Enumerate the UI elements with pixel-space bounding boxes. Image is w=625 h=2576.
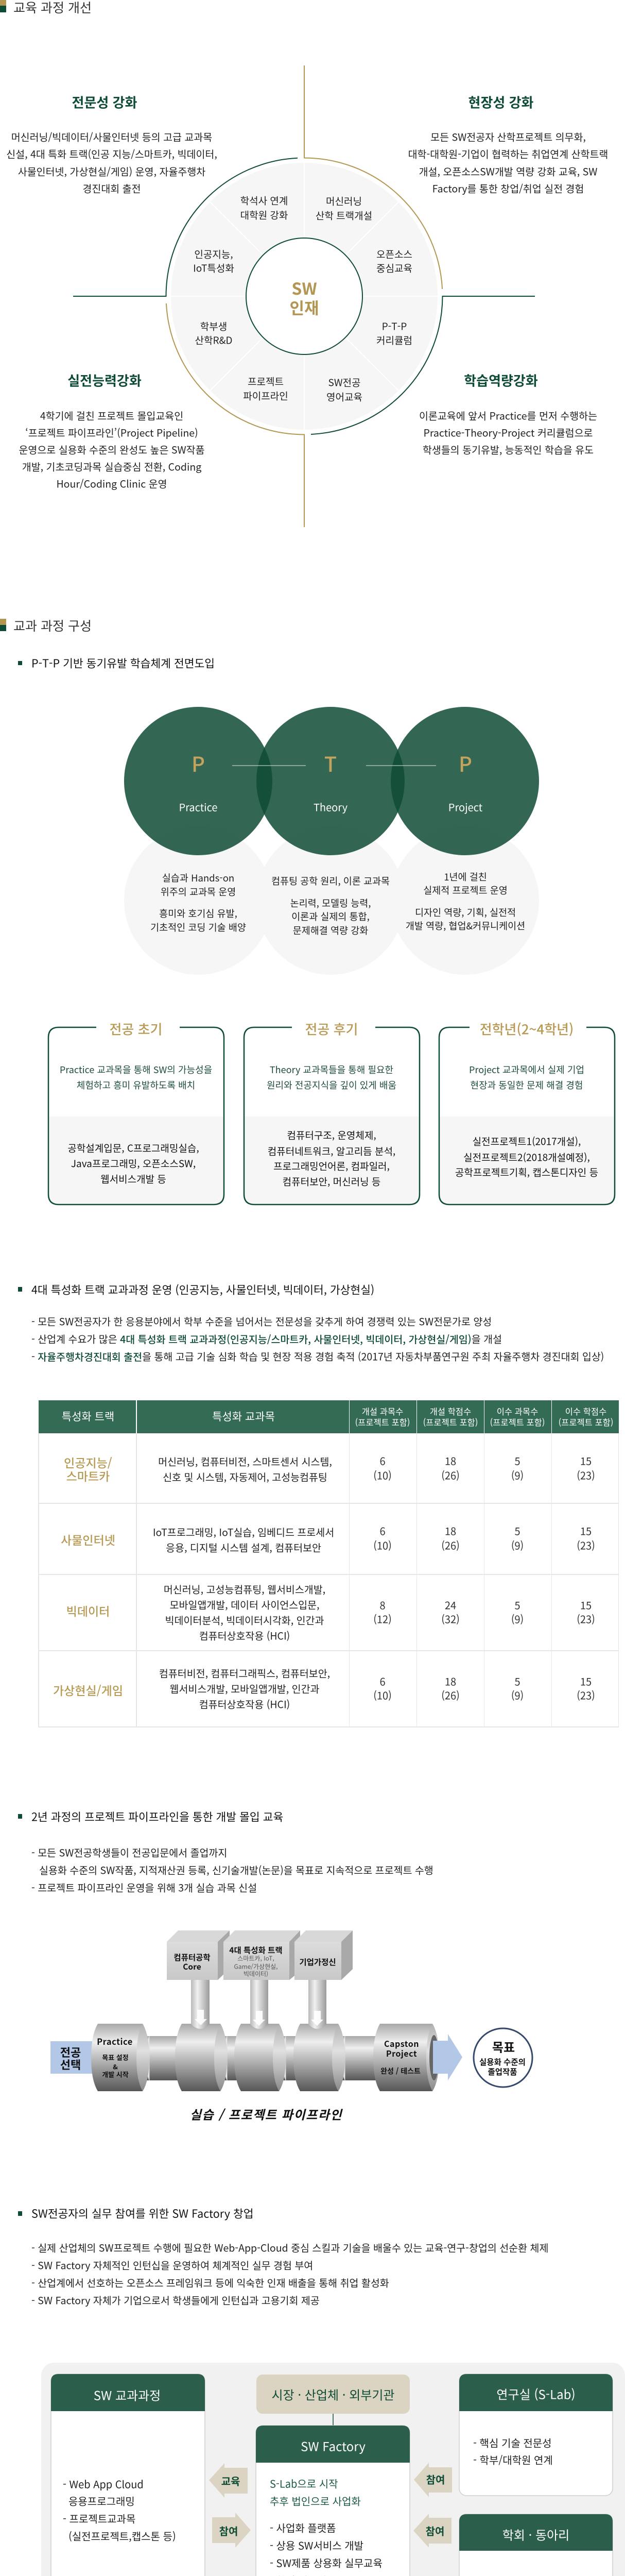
text block: learning ability: 학습역량강화 <box>464 371 538 389</box>
centre circle: SW talent: SW <box>291 276 317 300</box>
card: all years: 현장과 동일한 문제 해결 경험 <box>471 1078 583 1092</box>
theory detail text: 논리력, 모델링 능력, <box>290 896 371 910</box>
row: IoT <box>61 1523 595 1555</box>
sector labels: 대학원 강화 <box>240 208 288 222</box>
arrow: participation from S-Lab: 참여 <box>426 2472 445 2486</box>
label: capstone <box>380 2037 421 2076</box>
panel: SW factory ecosystem <box>41 2363 625 2576</box>
wheel disc with sectors <box>171 163 438 430</box>
card: S-Lab: 연구실 (S-Lab) <box>496 2384 576 2403</box>
arrow: participation from clubs <box>413 2514 452 2548</box>
card: SW factory: 추후 법인으로 사업화 <box>270 2494 361 2508</box>
card: late major: 프로그래밍언어론, 컴파일러, <box>273 1159 390 1173</box>
card: all years <box>439 1019 615 1205</box>
card: all years: 실전프로젝트2(2018개설예정), <box>463 1150 590 1164</box>
heading: curriculum composition: 교과 과정 구성 <box>13 616 92 635</box>
row: big data: 8 <box>379 1597 386 1613</box>
text block: learning ability: 이론교육에 앞서 Practice를 먼저 수행하는 <box>419 408 597 422</box>
card: SW curriculum: (실전프로젝트,캡스톤 등) <box>68 2529 176 2543</box>
row: big data: (12) <box>373 1612 392 1626</box>
text block: expertise: 경진대회 출전 <box>82 180 141 196</box>
sector labels: 인공지능, <box>194 247 233 261</box>
row: big data: 빅데이터 <box>66 1602 110 1619</box>
row: VR / game: (10) <box>373 1688 392 1702</box>
table header: (프로젝트 포함) <box>490 1416 545 1428</box>
box: market and industry: 시장 · 산업체 · 외부기관 <box>272 2385 394 2403</box>
card: late major <box>244 1019 420 1205</box>
text block: pipeline description: 실용화 수준의 SW작품, 지적재산권 등록, 신기술개발(논문)을 목표로 지속적으로 프로젝트 수행 <box>39 1862 433 1877</box>
row: big data: 15 <box>580 1597 592 1613</box>
practice detail text: 위주의 교과목 운영 <box>161 885 236 899</box>
sector labels: 머신러닝 <box>326 194 362 208</box>
card: early major: 웹서비스개발 등 <box>100 1172 166 1186</box>
card: SW factory: - 사업화 플랫폼 <box>270 2520 336 2535</box>
grey detail circles <box>124 826 539 975</box>
row: VR / game <box>53 1665 595 1711</box>
label: capstone: Project <box>386 2047 417 2059</box>
venn diagram: P-T-P <box>124 707 539 975</box>
text block: field practice: Factory를 통한 창업/취업 실전 경험 <box>432 180 584 196</box>
row: big data: (9) <box>511 1612 524 1626</box>
card: late major: 컴퓨터보안, 머신러닝 등 <box>283 1175 380 1188</box>
text block: SW factory description: - SW Factory 자체가 기업으로서 학생들에게 인턴십과 고용기회 제공 <box>31 2293 320 2307</box>
card: late major: 컴퓨터네트워크, 알고리듬 분석, <box>268 1144 395 1158</box>
row: IoT: (23) <box>577 1537 595 1553</box>
sector labels: P-T-P <box>382 319 407 333</box>
row: IoT: (26) <box>441 1537 460 1553</box>
card: SW factory: S-Lab으로 시작 <box>270 2476 338 2490</box>
text block: SW factory description: - 실제 산업체의 SW프로젝트 수행에 필요한 Web-App-Cloud 중심 스킬과 기술을 배울수 있는 교육-연구-창업의 선순환 체제 <box>31 2240 548 2255</box>
text block: practical ability: 개발, 기초코딩과목 실습중심 전환, Coding <box>22 459 201 474</box>
row: AI / smart car: 5 <box>514 1453 520 1468</box>
theory detail text: 문제해결 역량 강화 <box>293 924 368 937</box>
row: VR / game: 15 <box>580 1673 592 1689</box>
text block: expertise: 전문성 강화 <box>72 93 137 111</box>
circle titles: Theory <box>314 800 348 814</box>
box: entrepreneurship: 기업가정신 <box>299 1956 336 1968</box>
text block: practical ability <box>19 371 205 490</box>
text block: pipeline description: - 프로젝트 파이프라인 운영을 위해 3개 실습 과목 신설 <box>31 1879 257 1895</box>
table grid <box>39 1433 619 1727</box>
text block: field practice: 개설, 오픈소스SW개발 역량 강화 교육, SW <box>419 164 597 178</box>
card: late major: 전공 후기 <box>305 1019 358 1039</box>
table header: 이수 과목수 <box>497 1405 538 1417</box>
card: S-Lab: - 학부/대학원 연계 <box>473 2452 553 2467</box>
arrow: participation from S-Lab <box>414 2463 452 2497</box>
label: capstone: Capston <box>384 2037 419 2049</box>
practice detail text <box>150 871 246 934</box>
row: big data: (23) <box>577 1612 595 1626</box>
box: computer engineering core: 컴퓨터공학 <box>173 1952 211 1963</box>
card: SW curriculum <box>51 2374 205 2576</box>
subheading: P-T-P: P-T-P 기반 동기유발 학습체계 전면도입 <box>31 655 215 671</box>
row: AI / smart car: 머신러닝, 컴퓨터비전, 스마트센서 시스템, <box>158 1454 332 1468</box>
card: late major: 컴퓨터구조, 운영체제, <box>287 1128 376 1142</box>
row: AI / smart car: (26) <box>441 1467 460 1483</box>
sector labels: 파이프라인 <box>243 388 288 403</box>
card: clubs: 학회 · 동아리 <box>502 2526 569 2543</box>
card: all years: 공학프로젝트기획, 캡스톤디자인 등 <box>455 1165 598 1179</box>
green circles <box>124 707 539 855</box>
text block: learning ability: 학생들의 동기유발, 능동적인 학습을 유도 <box>423 442 594 456</box>
card: S-Lab: - 핵심 기술 전문성 <box>473 2435 552 2450</box>
row: IoT: (10) <box>373 1537 392 1553</box>
label: practice <box>97 2035 133 2079</box>
table header: 이수 학점수 <box>565 1405 606 1417</box>
card: SW curriculum: - 프로젝트교과목 <box>63 2511 135 2526</box>
text block: practical ability: ‘프로젝트 파이프라인’(Project Pipeline) <box>25 425 198 440</box>
text block: learning ability <box>419 371 597 456</box>
row: IoT: 사물인터넷 <box>61 1531 115 1548</box>
box: four tracks: Game/가상현실, <box>234 1962 278 1971</box>
row: IoT: 18 <box>445 1523 456 1538</box>
row: VR / game: 6 <box>379 1673 386 1689</box>
box: entrepreneurship <box>294 1930 353 1980</box>
card: SW factory: SW Factory <box>301 2437 366 2454</box>
card: SW curriculum: - Web App Cloud <box>63 2476 144 2492</box>
card: early major: Practice 교과목을 통해 SW의 가능성을 <box>60 1063 212 1076</box>
row: AI / smart car: 6 <box>379 1453 386 1468</box>
table header: (프로젝트 포함) <box>355 1416 410 1428</box>
card: SW factory: - 상용 SW서비스 개발 <box>270 2538 363 2552</box>
text block: field practice <box>408 93 608 196</box>
label: practice: 목표 설정 <box>102 2053 129 2062</box>
diagram: project pipeline <box>50 1930 532 2123</box>
text block: four tracks description <box>31 1314 604 1363</box>
text block: SW factory description: - SW Factory 자체적인 인턴십을 운영하여 체계적인 실무 경험 부여 <box>31 2258 313 2272</box>
text block: pipeline description: - 모든 SW전공학생들이 전공입문에서 졸업까지 <box>31 1844 227 1860</box>
circle: goal: 목표 <box>492 2037 515 2056</box>
connector lines <box>232 765 436 766</box>
card: early major: Java프로그래밍, 오픈소스SW, <box>71 1156 196 1171</box>
label: practice: 개발 시작 <box>102 2069 129 2079</box>
subheading: SW factory: SW전공자의 실무 참여를 위한 SW Factory 창업 <box>31 2205 254 2222</box>
sector labels: 오픈소스 <box>376 247 412 261</box>
sector labels: 학석사 연계 <box>240 194 288 207</box>
practice detail text: 흥미와 호기심 유발, <box>159 907 237 920</box>
circle: goal: 실용화 수준의 <box>479 2056 526 2067</box>
row: AI / smart car: (10) <box>373 1467 392 1483</box>
table header: 개설 학점수 <box>430 1405 471 1417</box>
row: IoT: (9) <box>511 1537 524 1553</box>
caption: 실습 / 프로젝트 파이프라인 <box>190 2105 343 2123</box>
row: AI / smart car <box>64 1453 595 1484</box>
box: market and industry <box>256 2375 410 2414</box>
box: four tracks: 빅데이터) <box>244 1969 268 1978</box>
sector labels: 커리큘럼 <box>376 333 412 347</box>
input block: major selection: 선택 <box>60 2056 81 2073</box>
row: VR / game: 컴퓨터상호작용 (HCI) <box>199 1696 290 1711</box>
text block: expertise: 사물인터넷, 가상현실/게임) 운영, 자율주행차 <box>18 164 205 178</box>
row: AI / smart car: 인공지능/ <box>64 1453 112 1471</box>
project detail text: 실제적 프로젝트 운영 <box>423 884 508 897</box>
card: late major: Theory 교과목들을 통해 필요한 <box>270 1063 393 1076</box>
card: S-Lab <box>459 2374 613 2496</box>
text block: four tracks description: - 자율주행차경진대회 출전을 통해 고급 기술 심화 학습 및 현장 적용 경험 축적 (2017년 자동차부품연구원 주최 자율주행차 경진대회 입상) <box>31 1349 604 1363</box>
text block: learning ability: Practice-Theory-Project 커리큘럼으로 <box>424 425 593 440</box>
arrow: output <box>433 2034 462 2080</box>
row: big data: 모바일앱개발, 데이터 사이언스입문, <box>170 1597 319 1612</box>
card: SW curriculum: SW 교과과정 <box>94 2385 161 2404</box>
row: VR / game: 웹서비스개발, 모바일앱개발, 인간과 <box>170 1681 320 1696</box>
row: IoT: IoT프로그래밍, IoT실습, 임베디드 프로세서 <box>153 1524 334 1539</box>
card: clubs <box>459 2514 613 2576</box>
sector labels: 영어교육 <box>326 389 362 404</box>
table header: 개설 과목수 <box>362 1405 403 1417</box>
row: AI / smart car: (23) <box>577 1467 595 1483</box>
row: big data: (32) <box>441 1612 460 1626</box>
project detail text <box>406 870 525 933</box>
text block: four tracks description: - 산업계 수요가 많은 4대 특성화 트랙 교과과정(인공지능/스마트카, 사물인터넷, 빅데이터, 가상현실/게임)을 개설 <box>31 1331 502 1346</box>
table header: 특성화 트랙 <box>62 1409 114 1424</box>
row: VR / game: 18 <box>445 1673 456 1689</box>
row: IoT: 15 <box>580 1523 592 1538</box>
card: late major: 원리와 전공지식을 깊이 있게 배움 <box>267 1078 396 1092</box>
circle: goal: 졸업작품 <box>488 2066 517 2077</box>
card: all years: Project 교과목에서 실제 기업 <box>469 1063 584 1076</box>
card: early major: 전공 초기 <box>110 1019 162 1039</box>
sector labels: IoT특성화 <box>193 261 234 275</box>
text block: expertise <box>6 93 217 196</box>
white arrows <box>195 2010 323 2026</box>
table header: (프로젝트 포함) <box>559 1416 613 1428</box>
text block: practical ability: 4학기에 걸친 프로젝트 몰입교육인 <box>40 408 183 422</box>
row: IoT: 응용, 디지털 시스템 설계, 컴퓨터보안 <box>166 1539 321 1555</box>
diagram: SW talent wheel <box>73 65 535 527</box>
project detail text: 1년에 걸친 <box>444 870 487 884</box>
sector labels: 학부생 <box>200 319 227 333</box>
row: big data <box>66 1582 595 1642</box>
cylinders <box>91 2024 439 2091</box>
sector labels <box>193 194 412 404</box>
text block: SW factory description <box>31 2240 548 2307</box>
centre circle: SW talent: 인재 <box>289 296 319 318</box>
label: capstone: 완성 / 테스트 <box>380 2066 421 2076</box>
sector labels: SW전공 <box>328 375 360 389</box>
text block: practical ability: Hour/Coding Clinic 운영 <box>56 476 167 490</box>
row: AI / smart car: 신호 및 시스템, 자동제어, 고성능컴퓨팅 <box>163 1469 327 1484</box>
circle: goal <box>474 2028 532 2087</box>
card: SW factory <box>256 2426 410 2576</box>
text block: field practice: 대학-대학원-기업이 협력하는 취업연계 산학트랙 <box>408 146 608 161</box>
arrow: education <box>209 2463 248 2498</box>
row: big data: 컴퓨터상호작용 (HCI) <box>199 1628 290 1642</box>
arrow: participation to factory <box>212 2513 251 2548</box>
row: big data: 5 <box>514 1597 520 1613</box>
box: computer engineering core: Core <box>183 1961 201 1972</box>
box: four tracks <box>223 1930 300 1980</box>
sector labels: 산학 트랙개설 <box>316 208 372 223</box>
practice detail text: 기초적인 코딩 기술 배양 <box>150 921 246 934</box>
arrow: participation from clubs: 참여 <box>426 2523 444 2538</box>
text block: practical ability: 운영으로 실용화 수준의 완성도 높은 SW작품 <box>19 442 205 456</box>
row: big data: 빅데이터분석, 빅데이터시각화, 인간과 <box>165 1613 324 1627</box>
text block: field practice: 모든 SW전공자 산학프로젝트 의무화, <box>430 129 586 144</box>
text block: pipeline description <box>31 1844 433 1895</box>
circle titles: P <box>192 748 205 778</box>
row: AI / smart car: 15 <box>580 1453 592 1468</box>
circle titles: Practice <box>179 800 217 814</box>
table: track curriculum <box>39 1400 619 1727</box>
box: computer engineering core <box>167 1930 230 1980</box>
input block: major selection: 전공 <box>60 2044 81 2060</box>
row: VR / game: 5 <box>514 1673 520 1689</box>
label: practice: Practice <box>97 2035 133 2047</box>
subheading: four tracks: 4대 특성화 트랙 교과과정 운영 (인공지능, 사물인터넷, 빅데이터, 가상현실) <box>31 1282 374 1297</box>
input block: major selection <box>50 2041 93 2074</box>
box: four tracks: 스마트카, IoT, <box>237 1954 274 1963</box>
sector labels: 산학R&D <box>195 333 233 347</box>
label: practice: & <box>113 2062 118 2071</box>
row: IoT: 5 <box>514 1523 520 1538</box>
vertical feed pipes <box>191 1980 326 2029</box>
card: early major <box>48 1019 224 1205</box>
text block: field practice: 현장성 강화 <box>468 93 534 111</box>
row: VR / game: 컴퓨터비전, 컴퓨터그래픽스, 컴퓨터보안, <box>159 1665 330 1681</box>
row: AI / smart car: (9) <box>511 1467 524 1483</box>
row: VR / game: (26) <box>441 1688 460 1702</box>
row: VR / game: (9) <box>511 1688 524 1702</box>
text block: practical ability: 실전능력강화 <box>67 371 142 389</box>
row: AI / smart car: 18 <box>445 1453 456 1468</box>
card: all years: 전학년(2~4학년) <box>480 1019 574 1039</box>
theory detail text <box>271 874 390 937</box>
outer ring and axis lines <box>73 65 535 527</box>
row: big data: 머신러닝, 고성능컴퓨팅, 웹서비스개발, <box>164 1582 325 1596</box>
table header: (프로젝트 포함) <box>423 1416 478 1428</box>
arrow: participation to factory: 참여 <box>219 2523 238 2538</box>
project detail text: 디자인 역량, 기획, 실전적 <box>415 906 516 919</box>
card: SW factory: - SW제품 상용화 실무교육 <box>270 2555 383 2570</box>
sector labels: 중심교육 <box>376 261 412 275</box>
row: VR / game: 가상현실/게임 <box>53 1681 123 1699</box>
practice detail text: 실습과 Hands-on <box>162 871 234 885</box>
text block: expertise: 머신러닝/빅데이터/사물인터넷 등의 고급 교과목 <box>11 129 212 144</box>
box: four tracks: 4대 특성화 트랙 <box>229 1944 283 1956</box>
text block: expertise: 신설, 4대 특화 트랙(인공 지능/스마트카, 빅데이터, <box>6 146 217 161</box>
circle titles: Project <box>448 800 483 814</box>
theory detail text: 이론과 실제의 통합, <box>291 910 370 923</box>
theory detail text: 컴퓨팅 공학 원리, 이론 교과목 <box>271 874 390 888</box>
circle titles <box>179 748 483 814</box>
connector <box>333 2414 334 2426</box>
card: SW curriculum: 응용프로그래밍 <box>68 2494 135 2508</box>
centre circle: SW talent <box>246 238 362 354</box>
horizontal pipe <box>144 2036 376 2080</box>
arrow: education: 교육 <box>221 2473 240 2488</box>
card: early major: 공학설계입문, C프로그래밍실습, <box>67 1141 199 1155</box>
card: early major: 체험하고 흥미 유발하도록 배치 <box>77 1078 195 1092</box>
row: IoT: 6 <box>379 1523 386 1538</box>
table header: 특성화 교과목 <box>212 1409 275 1424</box>
card: all years: 실전프로젝트1(2017개설), <box>473 1134 581 1148</box>
text block: SW factory description: - 산업계에서 선호하는 오픈소스 프레임워크 등에 익숙한 인재 배출을 통해 취업 활성화 <box>31 2275 389 2290</box>
row: big data: 24 <box>445 1597 456 1613</box>
subheading: project pipeline: 2년 과정의 프로젝트 파이프라인을 통한 개발 몰입 교육 <box>31 1808 283 1825</box>
row: VR / game: (23) <box>577 1688 595 1702</box>
circle titles: T <box>324 748 337 778</box>
table header <box>39 1400 619 1433</box>
project detail text: 개발 역량, 협업&커뮤니케이션 <box>406 919 525 933</box>
circle titles: P <box>459 748 472 778</box>
sector labels: 프로젝트 <box>248 374 284 388</box>
row: AI / smart car: 스마트카 <box>66 1467 110 1484</box>
text block: four tracks description: - 모든 SW전공자가 한 응용분야에서 학부 수준을 넘어서는 전문성을 갖추게 하여 경쟁력 있는 SW전문가로 양성 <box>31 1314 492 1328</box>
